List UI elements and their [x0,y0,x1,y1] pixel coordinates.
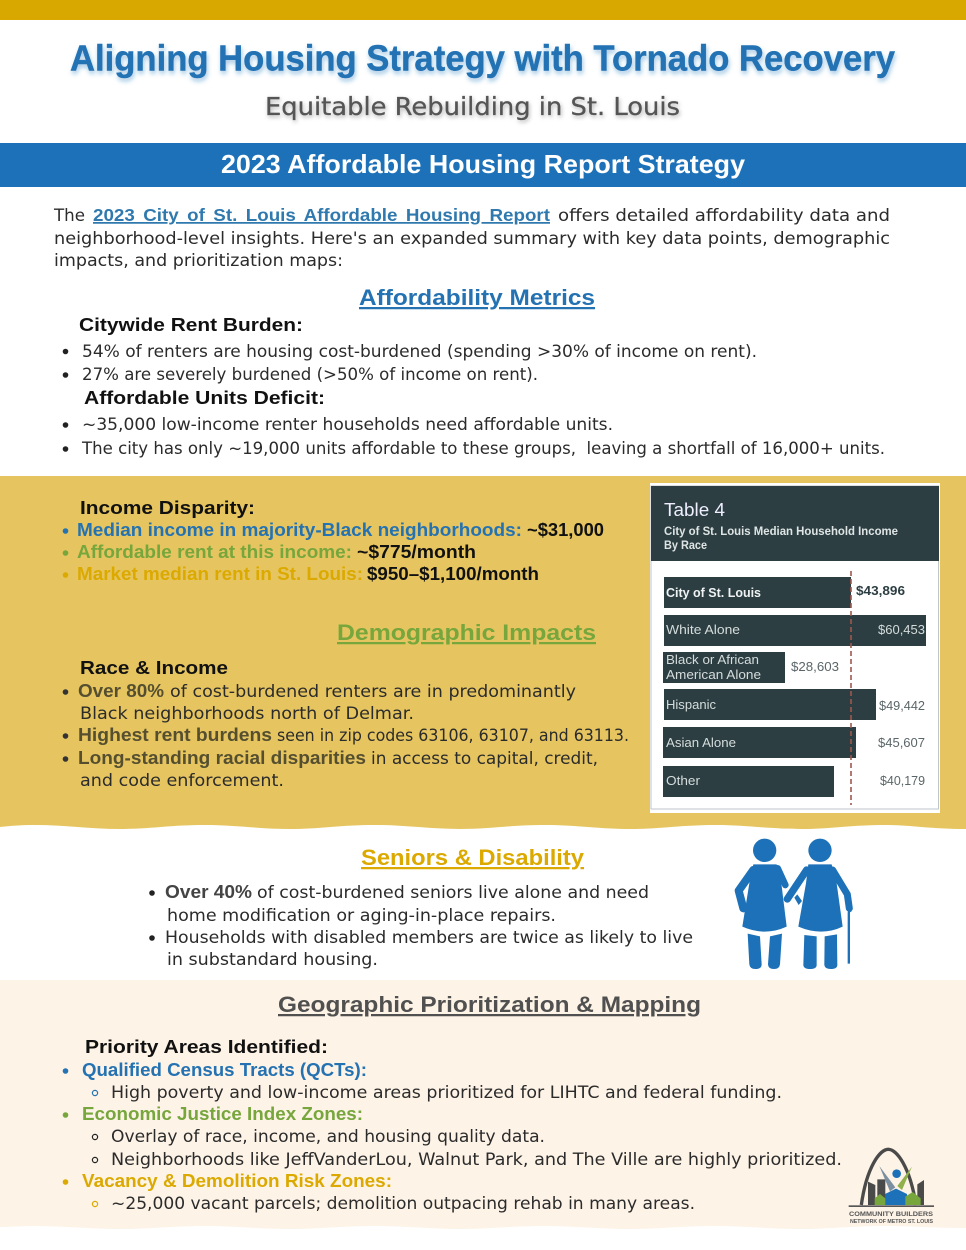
panel: priority areas list: Priority Areas Identified: [85,1036,328,1057]
chart header: By Race [664,540,707,552]
bar values: $43,896 [856,583,905,598]
intro paragraph: impacts, and prioritization maps: [54,250,343,270]
intro paragraph: The [53,205,85,225]
panel: income disparity [63,497,604,584]
intro paragraph: offers detailed affordability data and [558,205,890,225]
chart header [651,486,939,561]
chart header: Table 4 [664,500,725,520]
panel: income disparity: $950–$1,100/month [367,563,539,584]
panel: seniors list [149,881,693,969]
panel: race and income: in access to capital, credit, [371,748,598,768]
heading: seniors and disability: Seniors & Disability [361,845,585,870]
panel: seniors list: Households with disabled members are twice as likely to live [165,927,693,947]
geographic panel background [0,980,966,1229]
top gold band [0,0,966,20]
panel: priority areas list [63,1036,842,1213]
panel: race and income [63,657,629,790]
bar values: $45,607 [878,735,925,750]
heading: demographic impacts: Demographic Impacts [337,620,596,645]
panel: race and income: Race & Income [80,657,228,678]
panel: affordability metrics list [63,314,885,458]
panel: income disparity: ~$775/month [357,541,476,562]
panel: affordability metrics list: The city has only ~19,000 units affordable to these groups, leaving a shortfall of 16,000+ units. [81,438,885,458]
panel: priority areas list: Economic Justice Index Zones: [82,1103,363,1124]
heading: affordability metrics: Affordability Metrics [359,285,595,310]
subtitle: Equitable Rebuilding in St. Louis [265,92,680,121]
panel: race and income: and code enforcement. [80,770,284,790]
bar labels: Other [666,773,701,788]
panel: seniors list: in substandard housing. [167,949,378,969]
section banner [0,143,966,187]
panel: race and income: Long-standing racial disparities [78,747,366,768]
yellow panel background [0,476,966,829]
chart header: City of St. Louis Median Household Income [664,526,898,538]
intro paragraph: neighborhood-level insights. Here's an expanded summary with key data points, demographic [54,228,890,248]
icon: two seniors with cane [739,839,852,969]
panel: affordability metrics list: Affordable Units Deficit: [84,387,325,408]
bar labels: City of St. Louis [666,585,761,600]
bars [663,577,926,797]
panel: affordability metrics list: 54% of renters are housing cost-burdened (spending >30% of income on rent). [82,341,757,361]
bar labels: Black or African [666,652,759,667]
section banner: 2023 Affordable Housing Report Strategy [221,149,746,179]
bar values: $28,603 [791,659,839,674]
panel: race and income: seen in zip codes 63106, 63107, and 63113. [277,725,629,745]
panel: race and income: Highest rent burdens [78,724,272,745]
panel: income disparity: Income Disparity: [80,497,255,518]
logo: community builders network [849,1149,934,1225]
heading: geographic prioritization: Geographic Prioritization & Mapping [278,992,701,1017]
panel: priority areas list: ~25,000 vacant parcels; demolition outpacing rehab in many areas. [111,1193,695,1213]
panel: priority areas list: Overlay of race, income, and housing quality data. [111,1126,545,1146]
bar values: $60,453 [878,622,925,637]
logo: community builders network: NETWORK OF METRO ST. LOUIS [850,1219,934,1225]
panel: income disparity: Median income in majority-Black neighborhoods: [77,519,522,540]
bar labels: Hispanic [666,697,716,712]
panel: affordability metrics list: 27% are severely burdened (>50% of income on rent). [82,364,538,384]
panel: income disparity: Market median rent in St. Louis: [77,563,363,584]
panel: income disparity: Affordable rent at this income: [77,541,352,562]
panel: priority areas list: Vacancy & Demolition Risk Zones: [82,1170,392,1191]
bar values: $49,442 [879,698,925,713]
bar values: $40,179 [880,773,925,788]
citywide median line [850,571,852,805]
panel: affordability metrics list: ~35,000 low-income renter households need affordable units. [82,414,613,434]
intro paragraph [53,205,890,270]
panel: race and income: Over 80% [78,680,164,701]
panel: race and income: Black neighborhoods north of Delmar. [80,703,414,723]
panel: priority areas list: Qualified Census Tracts (QCTs): [82,1059,367,1080]
bar labels: American Alone [666,667,761,682]
panel: priority areas list: Neighborhoods like JeffVanderLou, Walnut Park, and The Ville are highly prioritized. [111,1149,842,1169]
title: Aligning Housing Strategy with Tornado Recovery [70,38,896,78]
panel: seniors list: Over 40% [165,881,252,902]
bar values [791,583,925,788]
bar chart: median household income by race [650,483,940,813]
panel: seniors list: of cost-burdened seniors live alone and need [257,882,649,902]
bar labels [666,585,761,788]
bar labels: White Alone [666,622,740,637]
intro paragraph: 2023 City of St. Louis Affordable Housing Report [93,205,550,225]
panel: seniors list: home modification or aging-in-place repairs. [167,905,556,925]
bar labels: Asian Alone [666,735,736,750]
logo: community builders network: COMMUNITY BUILDERS [849,1211,934,1218]
panel: priority areas list: High poverty and low-income areas prioritized for LIHTC and federal funding. [111,1082,782,1102]
panel: affordability metrics list: Citywide Rent Burden: [79,314,303,335]
panel: income disparity: ~$31,000 [527,519,604,540]
panel: race and income: of cost-burdened renters are in predominantly [170,681,576,701]
